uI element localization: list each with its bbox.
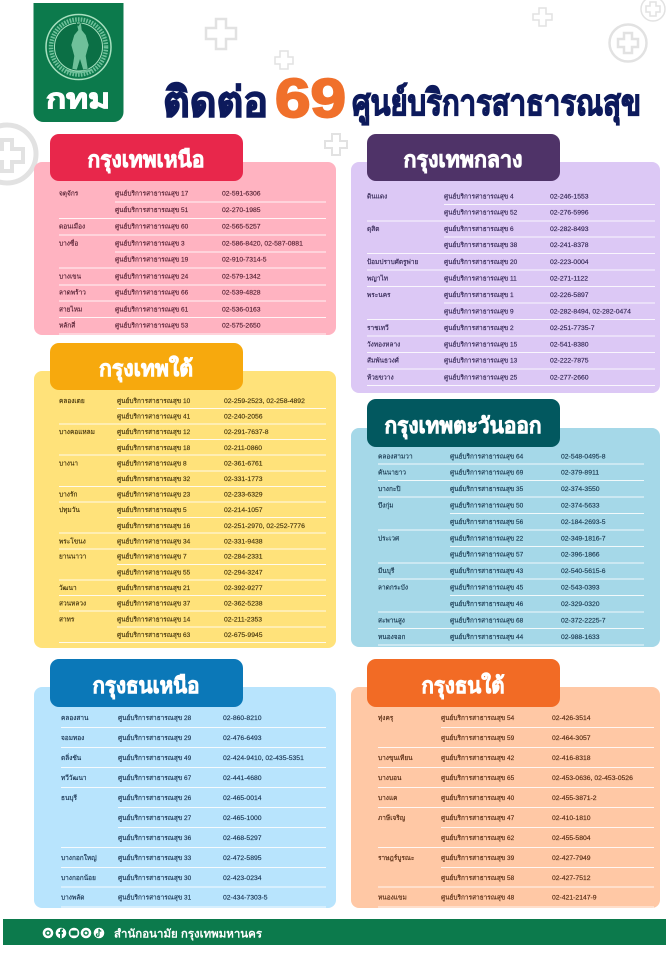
footer text: สำนักอนามัย กรุงเทพมหานคร	[114, 926, 263, 942]
table rows: ศูนย์บริการสาธารณสุข 4	[444, 192, 514, 200]
table rows: 02-586-8420, 02-587-0881	[222, 240, 303, 248]
table rows: สาทร	[59, 616, 75, 624]
table rows: ปทุมวัน	[59, 506, 80, 514]
table rows: บางคอแหลม	[59, 429, 95, 436]
table rows: 02-226-5897	[550, 292, 589, 299]
table rows: 02-270-1985	[222, 207, 261, 214]
table rows: 02-548-0495-8	[561, 454, 606, 460]
table rows: ศูนย์บริการสาธารณสุข 63	[117, 631, 191, 639]
table rows: 02-910-7314-5	[222, 256, 267, 264]
table rows: คลองสามวา	[378, 454, 413, 460]
table rows: ศูนย์บริการสาธารณสุข 52	[444, 208, 518, 216]
heading: กรุงเทพกลาง: กรุงเทพกลาง	[404, 147, 522, 174]
table rows: ศูนย์บริการสาธารณสุข 43	[450, 567, 524, 575]
table rows: 02-539-4828	[222, 290, 261, 296]
table rows: ศูนย์บริการสาธารณสุข 20	[444, 258, 518, 266]
table rows: 02-211-0860	[224, 445, 262, 452]
table rows: 02-416-8318	[552, 755, 591, 762]
table rows: 02-423-0234	[223, 875, 262, 882]
table rows: พญาไท	[367, 274, 388, 282]
table rows: 02-988-1633	[561, 634, 600, 641]
table rows: ศูนย์บริการสาธารณสุข 34	[117, 538, 191, 546]
table rows: บางพลัด	[61, 894, 84, 902]
table rows: 02-465-0014	[223, 795, 262, 802]
table rows: 02-392-9277	[224, 585, 263, 592]
table rows: 02-540-5615-6	[561, 568, 606, 575]
table rows: ศูนย์บริการสาธารณสุข 1	[444, 291, 514, 299]
table rows: ศูนย์บริการสาธารณสุข 48	[441, 894, 515, 902]
table rows: ศูนย์บริการสาธารณสุข 25	[444, 374, 518, 382]
table rows: 02-472-5895	[223, 855, 262, 862]
heading: กรุงเทพตะวันออก	[367, 399, 560, 447]
table rows: 02-246-1553	[550, 194, 589, 200]
table rows: 02-591-6306	[222, 190, 261, 198]
table rows: 02-223-0004	[550, 259, 589, 266]
table rows: 02-251-7735-7	[550, 325, 595, 332]
table rows: ลาดกระบัง	[378, 584, 408, 592]
table rows: ศูนย์บริการสาธารณสุข 65	[441, 774, 515, 782]
title: 69	[275, 67, 346, 129]
table rows: ศูนย์บริการสาธารณสุข 56	[450, 518, 524, 526]
table rows: 02-424-9410, 02-435-5351	[223, 755, 304, 762]
table rows: ศูนย์บริการสาธารณสุข 5	[117, 506, 187, 514]
table rows: ศูนย์บริการสาธารณสุข 60	[115, 222, 189, 230]
table rows: 02-675-9945	[224, 632, 263, 639]
table rows: 02-362-5238	[224, 600, 263, 608]
logo: BMA badge	[34, 3, 124, 122]
table rows: 02-455-3871-2	[552, 795, 597, 802]
heading: กรุงเทพเหนือ: กรุงเทพเหนือ	[88, 147, 204, 174]
table rows: ศูนย์บริการสาธารณสุข 51	[115, 206, 189, 214]
table rows: 02-536-0163	[222, 306, 261, 314]
panel: กรุงธนใต้	[351, 659, 660, 908]
icons: social media	[43, 928, 104, 938]
table rows: บางกอกน้อย	[61, 874, 96, 882]
table rows: ศูนย์บริการสาธารณสุข 14	[117, 616, 191, 624]
table rows: ศูนย์บริการสาธารณสุข 3	[115, 240, 185, 248]
panel: กรุงเทพตะวันออก	[351, 399, 660, 647]
table rows: 02-468-5297	[223, 835, 262, 842]
table rows: ศูนย์บริการสาธารณสุข 59	[441, 734, 515, 742]
table rows: ศูนย์บริการสาธารณสุข 13	[444, 356, 518, 364]
table rows: ศูนย์บริการสาธารณสุข 38	[444, 241, 518, 249]
heading: กรุงธนใต้	[367, 659, 560, 707]
table rows: ศูนย์บริการสาธารณสุข 29	[118, 734, 192, 742]
table rows: บางรัก	[59, 490, 77, 498]
table rows: ศูนย์บริการสาธารณสุข 6	[444, 225, 514, 233]
table rows: คันนายาว	[378, 468, 406, 476]
table rows: หลักสี่	[59, 320, 75, 330]
table rows: ศูนย์บริการสาธารณสุข 45	[450, 584, 524, 592]
table rows: บางแค	[378, 795, 398, 802]
table rows: ราชเทวี	[367, 324, 389, 332]
table rows: ศูนย์บริการสาธารณสุข 58	[441, 874, 515, 882]
table rows: 02-222-7875	[550, 358, 589, 364]
table rows: ศูนย์บริการสาธารณสุข 69	[450, 468, 524, 476]
table rows: 02-427-7949	[552, 855, 591, 862]
table rows: 02-284-2331	[224, 554, 263, 560]
table rows: 02-276-5996	[550, 210, 589, 216]
table rows: 02-282-8494, 02-282-0474	[550, 308, 631, 316]
table rows: จอมทอง	[61, 735, 84, 742]
table rows: มีนบุรี	[378, 567, 395, 575]
table rows: ศูนย์บริการสาธารณสุข 22	[450, 534, 524, 542]
table rows: 02-277-2660	[550, 374, 589, 382]
table rows: 02-251-2970, 02-252-7776	[224, 523, 305, 530]
table rows: ดินแดง	[367, 192, 387, 200]
table rows: วังทองหลาง	[367, 340, 400, 348]
table rows: ศูนย์บริการสาธารณสุข 9	[444, 308, 514, 316]
table rows: 02-434-7303-5	[223, 894, 268, 902]
heading: กรุงเทพใต้	[50, 343, 243, 390]
table rows: 02-453-0636, 02-453-0526	[552, 775, 633, 782]
table rows: 02-233-6329	[224, 492, 263, 498]
table rows	[59, 190, 326, 334]
table rows: 02-372-2225-7	[561, 618, 606, 624]
table rows: ศูนย์บริการสาธารณสุข 49	[118, 754, 192, 762]
table rows: ทุ่งครุ	[378, 715, 394, 722]
panel: กรุงเทพใต้	[34, 343, 336, 648]
table rows: ศูนย์บริการสาธารณสุข 35	[450, 485, 524, 493]
table rows: ศูนย์บริการสาธารณสุข 66	[115, 288, 189, 296]
heading: กรุงเทพเหนือ	[50, 134, 243, 181]
table rows: 02-476-6493	[223, 735, 262, 742]
table rows: ป้อมปราบศัตรูพ่าย	[367, 258, 418, 266]
table rows: ศูนย์บริการสาธารณสุข 54	[441, 714, 515, 722]
table rows	[378, 714, 654, 907]
table rows: ศูนย์บริการสาธารณสุข 28	[118, 714, 192, 722]
table rows	[61, 714, 326, 907]
table rows: ศูนย์บริการสาธารณสุข 26	[118, 794, 192, 802]
table rows: บางขุนเทียน	[378, 754, 413, 762]
table rows: 02-331-9438	[224, 538, 263, 546]
table rows	[378, 452, 644, 645]
table rows: พระนคร	[367, 292, 391, 299]
table rows: 02-565-5257	[222, 224, 261, 230]
table rows: หนองจอก	[378, 634, 406, 641]
table rows: 02-374-3550	[561, 486, 600, 493]
table rows: ทวีวัฒนา	[61, 774, 87, 782]
table rows: 02-541-8380	[550, 342, 589, 348]
table rows: ลาดพร้าว	[59, 288, 86, 296]
table rows: 02-329-0320	[561, 601, 600, 608]
title	[163, 67, 641, 129]
background medical crosses	[0, 0, 665, 183]
table rows: ศูนย์บริการสาธารณสุข 2	[444, 324, 514, 332]
table rows: ศูนย์บริการสาธารณสุข 42	[441, 754, 515, 762]
table rows: ดุสิต	[367, 225, 379, 233]
table rows: วัฒนา	[59, 584, 77, 592]
table rows: สายไหม	[59, 306, 82, 314]
heading: กรุงธนใต้: กรุงธนใต้	[422, 672, 504, 700]
table rows: ศูนย์บริการสาธารณสุข 44	[450, 633, 524, 641]
table rows: 02-455-5804	[552, 835, 591, 842]
table rows: ศูนย์บริการสาธารณสุข 67	[118, 774, 192, 782]
table rows: ศูนย์บริการสาธารณสุข 62	[441, 834, 515, 842]
table rows: 02-214-1057	[224, 507, 263, 514]
table rows: ศูนย์บริการสาธารณสุข 17	[115, 190, 189, 198]
table rows: ศูนย์บริการสาธารณสุข 46	[450, 600, 524, 608]
table rows	[59, 397, 326, 642]
table rows: ศูนย์บริการสาธารณสุข 64	[450, 452, 524, 460]
table rows: 02-464-3057	[552, 735, 591, 742]
table rows: ยานนาวา	[59, 554, 87, 560]
table rows: ศูนย์บริการสาธารณสุข 30	[118, 874, 192, 882]
table rows: ศูนย์บริการสาธารณสุข 7	[117, 552, 187, 560]
table rows: ศูนย์บริการสาธารณสุข 47	[441, 814, 515, 822]
table rows: 02-860-8210	[223, 715, 262, 722]
table rows: 02-211-2353	[224, 616, 262, 624]
table rows: คลองเตย	[59, 398, 85, 405]
table rows: ภาษีเจริญ	[378, 814, 406, 822]
table rows: บางกอกใหญ่	[61, 854, 97, 862]
table rows: ศูนย์บริการสาธารณสุข 10	[117, 397, 191, 405]
logo wordmark: กทม	[46, 84, 110, 114]
table rows: ศูนย์บริการสาธารณสุข 23	[117, 490, 191, 498]
panel: กรุงเทพเหนือ	[34, 134, 336, 335]
footer bar	[3, 919, 666, 945]
table rows: บางซื่อ	[59, 238, 78, 248]
panel: กรุงเทพกลาง	[351, 134, 660, 393]
table rows: ศูนย์บริการสาธารณสุข 50	[450, 502, 524, 510]
table rows: 02-427-7512	[552, 875, 591, 882]
table rows: ตลิ่งชัน	[61, 753, 82, 762]
table rows: 02-441-4680	[223, 775, 262, 782]
table rows: 02-331-1773	[224, 476, 263, 483]
table rows: 02-259-2523, 02-258-4892	[224, 398, 305, 405]
table rows: ศูนย์บริการสาธารณสุข 61	[115, 306, 189, 314]
table rows: บางกะปิ	[378, 485, 401, 493]
heading: กรุงเทพใต้: กรุงเทพใต้	[99, 355, 193, 383]
panel: กรุงธนเหนือ	[34, 659, 336, 908]
table rows: ศูนย์บริการสาธารณสุข 53	[115, 322, 189, 330]
table rows: ศูนย์บริการสาธารณสุข 36	[118, 834, 192, 842]
table rows: 02-465-1000	[223, 815, 262, 822]
table rows: ราษฎร์บูรณะ	[378, 854, 414, 862]
table rows: ศูนย์บริการสาธารณสุข 15	[444, 340, 518, 348]
table rows: บางนา	[59, 460, 78, 468]
table rows: ศูนย์บริการสาธารณสุข 57	[450, 550, 524, 558]
table rows: ศูนย์บริการสาธารณสุข 37	[117, 600, 191, 608]
table rows: สะพานสูง	[378, 618, 405, 624]
table rows: 02-579-1342	[222, 274, 261, 280]
table rows: 02-543-0393	[561, 584, 600, 592]
table rows: ศูนย์บริการสาธารณสุข 55	[117, 568, 191, 576]
table rows: 02-426-3514	[552, 715, 591, 722]
heading: กรุงเทพกลาง	[367, 134, 560, 181]
table rows: ศูนย์บริการสาธารณสุข 19	[115, 256, 189, 264]
table rows: สัมพันธวงศ์	[367, 356, 400, 364]
table rows: 02-282-8493	[550, 226, 589, 233]
table rows: ศูนย์บริการสาธารณสุข 33	[118, 854, 192, 862]
table rows: 02-410-1810	[552, 815, 591, 822]
table rows: ศูนย์บริการสาธารณสุข 24	[115, 272, 189, 280]
table rows: ศูนย์บริการสาธารณสุข 11	[444, 274, 517, 282]
table rows: 02-396-1866	[561, 552, 600, 558]
table rows: ศูนย์บริการสาธารณสุข 16	[117, 522, 191, 530]
table rows: จตุจักร	[59, 190, 79, 198]
table rows: 02-241-8378	[550, 242, 589, 249]
table rows: ศูนย์บริการสาธารณสุข 12	[117, 428, 191, 436]
table rows: ศูนย์บริการสาธารณสุข 18	[117, 444, 191, 452]
table rows: ศูนย์บริการสาธารณสุข 27	[118, 814, 192, 822]
table rows: 02-361-6761	[224, 460, 263, 468]
table rows: 02-271-1122	[550, 276, 588, 282]
table rows: บึงกุ่ม	[378, 502, 394, 510]
table rows: ธนบุรี	[61, 794, 78, 802]
heading: กรุงธนเหนือ	[50, 659, 243, 707]
heading: กรุงเทพตะวันออก: กรุงเทพตะวันออก	[384, 413, 542, 440]
title: ติดต่อ	[163, 79, 268, 125]
table rows: ศูนย์บริการสาธารณสุข 68	[450, 616, 524, 624]
table rows: ศูนย์บริการสาธารณสุข 41	[117, 412, 191, 420]
table rows: 02-421-2147-9	[552, 894, 597, 902]
table rows: ศูนย์บริการสาธารณสุข 8	[117, 460, 187, 468]
table rows: บางบอน	[378, 775, 402, 782]
table rows: 02-240-2056	[224, 414, 263, 420]
table rows	[367, 192, 655, 386]
table rows: ห้วยขวาง	[367, 374, 394, 382]
table rows: ดอนเมือง	[59, 222, 85, 230]
table rows: ศูนย์บริการสาธารณสุข 21	[117, 584, 191, 592]
table rows: ศูนย์บริการสาธารณสุข 32	[117, 475, 191, 483]
table rows: บางเขน	[59, 274, 82, 280]
table rows: 02-374-5633	[561, 502, 600, 510]
table rows: 02-184-2693-5	[561, 519, 606, 526]
heading: กรุงธนเหนือ: กรุงธนเหนือ	[92, 673, 200, 700]
table rows: คลองสาน	[61, 715, 89, 722]
table rows: 02-294-3247	[224, 570, 263, 576]
table rows: ศูนย์บริการสาธารณสุข 31	[118, 894, 192, 902]
table rows: 02-291-7637-8	[224, 429, 269, 436]
table rows: สวนหลวง	[59, 600, 86, 608]
table rows: หนองแขม	[378, 894, 407, 902]
table rows: ศูนย์บริการสาธารณสุข 40	[441, 794, 515, 802]
table rows: 02-379-8911	[561, 470, 599, 476]
table rows: พระโขนง	[59, 538, 86, 546]
table rows: ประเวศ	[378, 536, 400, 542]
table rows: ศูนย์บริการสาธารณสุข 39	[441, 854, 515, 862]
table rows: 02-349-1816-7	[561, 536, 606, 542]
table rows: 02-575-2650	[222, 322, 261, 330]
